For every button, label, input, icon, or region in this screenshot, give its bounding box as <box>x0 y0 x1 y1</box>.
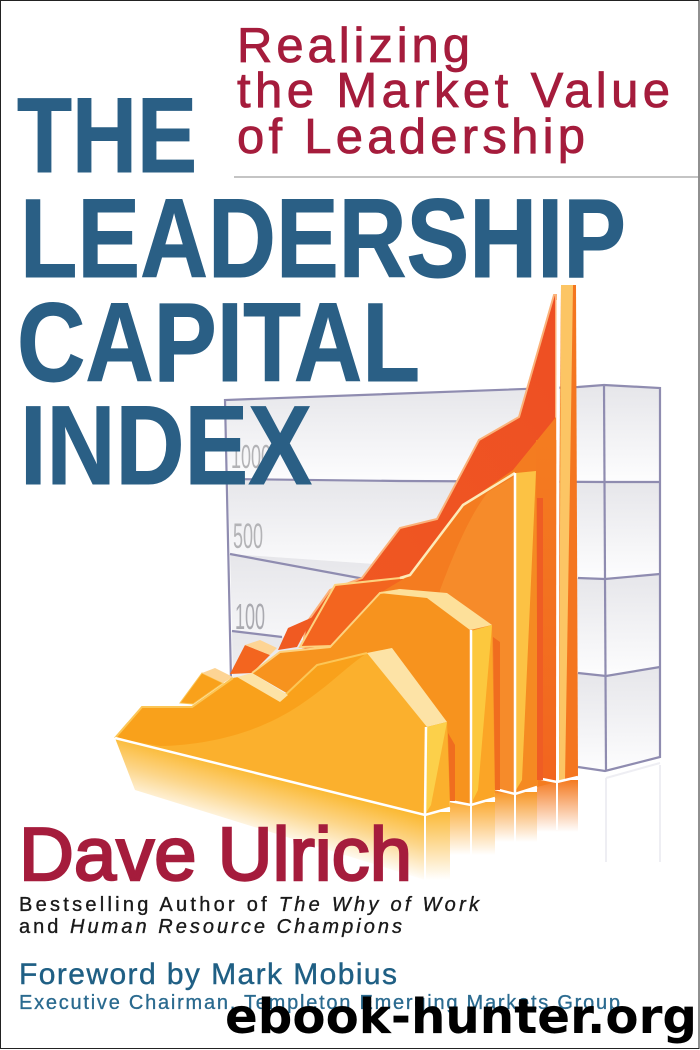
subtitle rule <box>234 176 700 178</box>
second orange series <box>278 471 543 794</box>
author name: Dave Ulrich <box>19 812 412 896</box>
author credentials <box>19 894 480 938</box>
back red series <box>300 295 556 787</box>
small left back peaks <box>180 640 277 704</box>
title line: CAPITAL: CAPITAL <box>17 280 420 405</box>
subtitle line 3: of Leadership <box>237 110 585 164</box>
title line: INDEX: INDEX <box>20 383 312 508</box>
watermark: ebook-hunter.org <box>225 989 697 1045</box>
subtitle <box>237 19 670 164</box>
chart illustration <box>115 285 660 880</box>
floor reflection <box>115 738 578 880</box>
axis label 1000: 1000 <box>231 438 271 475</box>
title line: THE: THE <box>17 75 197 195</box>
credentials line 1: Bestselling Author of The Why of Work <box>19 894 480 916</box>
main title <box>17 75 626 508</box>
glass grid background <box>225 385 660 862</box>
front orange series <box>115 648 455 815</box>
subtitle line 1: Realizing <box>237 19 470 73</box>
foreword role: Executive Chairman, Templeton Emerging Markets Group <box>19 992 620 1014</box>
credentials line 2: and Human Resource Champions <box>19 916 402 938</box>
third orange series <box>252 589 500 805</box>
tall right bar <box>536 285 578 782</box>
chart illustration: 100 <box>235 596 265 637</box>
subtitle line 2: the Market Value <box>237 64 670 118</box>
foreword: Foreword by Mark Mobius <box>19 958 397 991</box>
axis label 500: 500 <box>233 517 263 556</box>
